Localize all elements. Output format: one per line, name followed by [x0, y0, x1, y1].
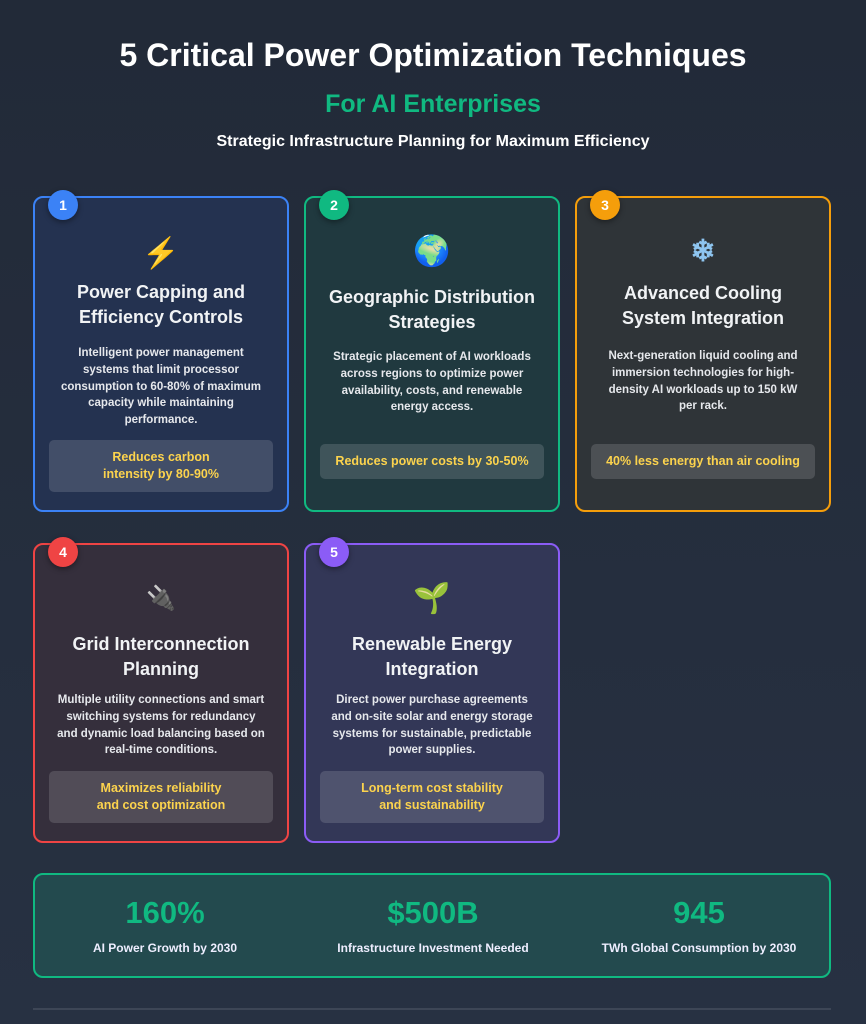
stat 2	[337, 895, 529, 955]
badge 2: 2	[330, 197, 338, 213]
panel: card 2	[304, 196, 560, 512]
description: capacity while maintaining	[88, 397, 234, 409]
stat 1	[93, 895, 237, 955]
description: per rack.	[679, 400, 727, 412]
highlight: Long-term cost stability	[361, 781, 503, 795]
heading	[622, 283, 784, 328]
badge 3: 3	[601, 197, 609, 213]
icon: snowflake: ❄	[690, 235, 716, 268]
description: immersion technologies for high-	[612, 367, 794, 379]
badge 1: 1	[59, 197, 67, 213]
heading: Advanced Cooling	[624, 283, 782, 303]
badge 2	[319, 190, 349, 220]
icon: globe: 🌍	[413, 235, 451, 268]
heading	[329, 287, 535, 332]
description: Next-generation liquid cooling and	[608, 350, 798, 362]
description: performance.	[125, 414, 197, 426]
description: power supplies.	[389, 744, 475, 756]
panel: card 1	[33, 196, 289, 512]
heading	[72, 634, 250, 679]
stat 3: 945	[673, 895, 725, 930]
badge 5: 5	[330, 544, 338, 560]
heading	[352, 634, 512, 679]
heading: Planning	[123, 659, 199, 679]
heading: Grid Interconnection	[72, 634, 250, 654]
stat 3	[602, 895, 796, 955]
panel: stats	[33, 873, 831, 978]
highlight: and sustainability	[379, 798, 485, 812]
highlight: Reduces carbon	[112, 450, 210, 464]
badge 3	[590, 190, 620, 220]
title: 5 Critical Power Optimization Techniques	[119, 37, 747, 73]
description	[333, 351, 531, 413]
description: systems for sustainable, predictable	[333, 728, 531, 740]
badge 4	[48, 537, 78, 567]
highlight	[320, 771, 544, 823]
description: and on-site solar and energy storage	[331, 711, 533, 723]
panel: card 4	[33, 543, 289, 843]
highlight: and cost optimization	[97, 798, 225, 812]
description: energy access.	[391, 401, 473, 413]
description: across regions to optimize power	[341, 368, 523, 380]
description: Multiple utility connections and smart	[58, 694, 264, 706]
heading: Geographic Distribution	[329, 287, 535, 307]
description: consumption to 60-80% of maximum	[61, 381, 261, 393]
stat 3: TWh Global Consumption by 2030	[602, 941, 796, 955]
icon: lightning: ⚡	[142, 237, 180, 270]
description: density AI workloads up to 150 kW	[609, 384, 797, 396]
description: Direct power purchase agreements	[336, 694, 528, 706]
highlight: Maximizes reliability	[101, 781, 221, 795]
tagline: Strategic Infrastructure Planning for Maximum Efficiency	[216, 133, 649, 150]
heading: Renewable Energy	[352, 634, 512, 654]
highlight	[320, 444, 544, 479]
heading: System Integration	[622, 308, 784, 328]
description	[331, 694, 533, 756]
heading	[77, 282, 245, 327]
stat 2: Infrastructure Investment Needed	[337, 941, 529, 955]
heading: Integration	[386, 659, 478, 679]
description: Intelligent power management	[78, 347, 244, 359]
description: and dynamic load balancing based on	[57, 728, 265, 740]
description: systems that limit processor	[83, 364, 239, 376]
highlight	[49, 440, 273, 492]
panel: card 5	[304, 543, 560, 843]
highlight: 40% less energy than air cooling	[606, 454, 800, 468]
highlight	[49, 771, 273, 823]
description	[57, 694, 265, 756]
stat 1: AI Power Growth by 2030	[93, 941, 237, 955]
stat 1: 160%	[125, 895, 205, 930]
stat 2: $500B	[387, 895, 479, 930]
heading: Efficiency Controls	[79, 307, 243, 327]
icon: seedling: 🌱	[413, 582, 451, 615]
heading: Strategies	[388, 312, 476, 332]
description: Strategic placement of AI workloads	[333, 351, 531, 363]
description: availability, costs, and renewable	[342, 385, 522, 397]
description	[608, 350, 798, 412]
description: switching systems for redundancy	[66, 711, 256, 723]
highlight: intensity by 80-90%	[103, 467, 219, 481]
highlight	[591, 444, 815, 479]
badge 4: 4	[59, 544, 67, 560]
heading: Power Capping and	[77, 282, 245, 302]
description	[61, 347, 261, 426]
panel: card 3	[575, 196, 831, 512]
subtitle: For AI Enterprises	[325, 90, 541, 118]
highlight: Reduces power costs by 30-50%	[335, 454, 529, 468]
badge 1	[48, 190, 78, 220]
description: real-time conditions.	[105, 744, 217, 756]
badge 5	[319, 537, 349, 567]
icon: plug: 🔌	[146, 585, 176, 612]
